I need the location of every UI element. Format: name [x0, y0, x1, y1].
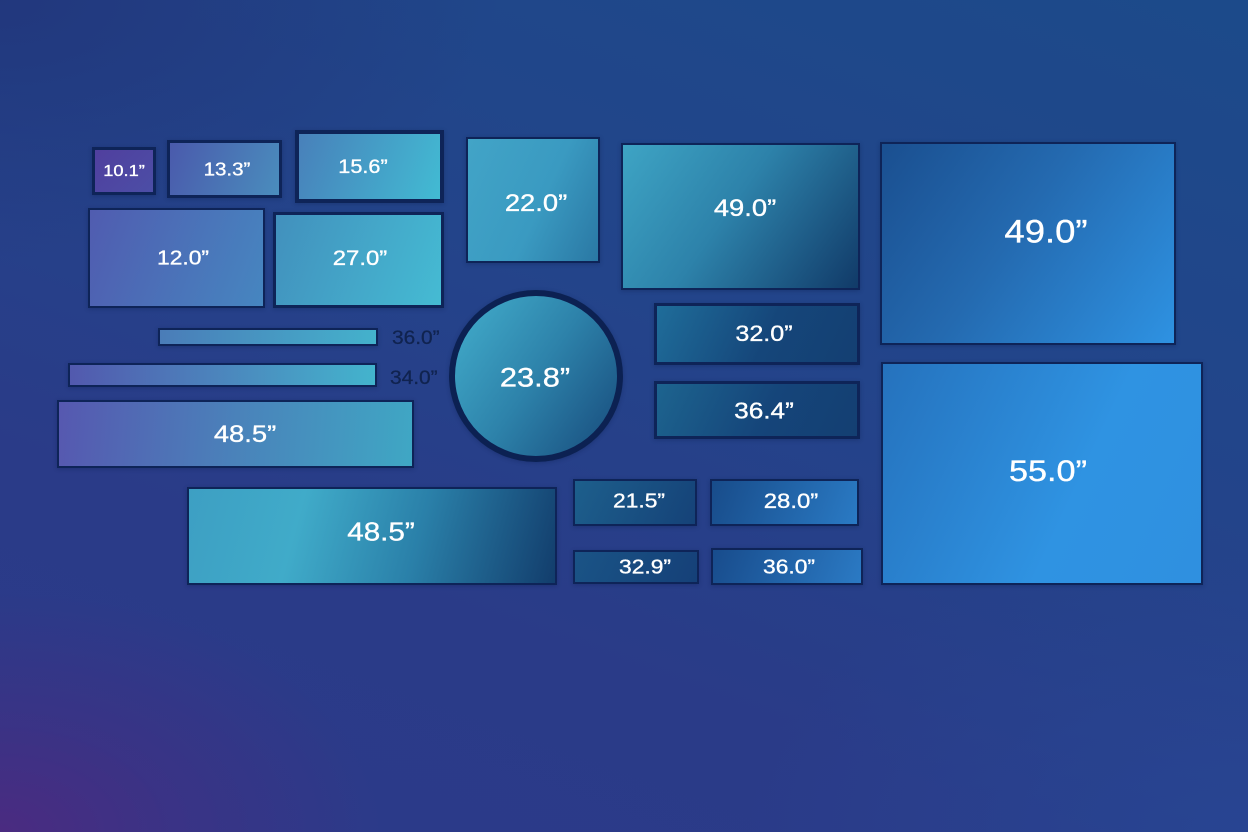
screen 36.0 inch: 36.0”: [763, 556, 815, 578]
screen 12.0 inch: 12.0”: [157, 248, 209, 270]
screen 32.9 inch: 32.9”: [619, 556, 671, 578]
screen 32.0 inch: 32.0”: [735, 321, 793, 346]
screen 49.0 inch medium: [621, 143, 860, 290]
screen 10.1 inch: [92, 147, 156, 195]
screen 15.6 inch: 15.6”: [338, 157, 388, 178]
screen 23.8 inch circle: [449, 290, 623, 462]
screen 55.0 inch: [881, 362, 1203, 585]
screen 22.0 inch: [466, 137, 600, 263]
screen 36.4 inch: 36.4”: [734, 398, 794, 424]
screen 15.6 inch: [295, 130, 444, 203]
bar screen 34.0 inch: [68, 363, 377, 387]
screen 36.0 inch: [711, 548, 863, 585]
screen 21.5 inch: [573, 479, 697, 526]
screen 28.0 inch: 28.0”: [764, 490, 818, 513]
screen 22.0 inch: 22.0”: [505, 190, 567, 217]
screen 48.5 inch lower: 48.5”: [347, 516, 415, 546]
screen 48.5 inch upper: [57, 400, 414, 468]
screen 49.0 inch large: 49.0”: [1004, 214, 1088, 250]
screen 27.0 inch: [273, 212, 444, 308]
screen 36.4 inch: [654, 381, 860, 439]
screen 48.5 inch lower: [187, 487, 557, 585]
screen 32.9 inch: [573, 550, 699, 584]
screen 13.3 inch: 13.3”: [204, 160, 250, 180]
bar screen 36.0 inch: [158, 328, 378, 346]
screen 49.0 inch medium: 49.0”: [714, 195, 776, 222]
screen 12.0 inch: [88, 208, 265, 308]
screen 32.0 inch: [654, 303, 860, 365]
screen 28.0 inch: [710, 479, 859, 526]
screen 21.5 inch: 21.5”: [613, 490, 665, 512]
screen 48.5 inch upper: 48.5”: [214, 421, 276, 448]
screen 49.0 inch large: [880, 142, 1176, 345]
screen 55.0 inch: 55.0”: [1009, 455, 1087, 488]
label 34.0 inch: 34.0”: [390, 368, 438, 389]
screen 13.3 inch: [167, 140, 282, 198]
screen 27.0 inch: 27.0”: [333, 247, 387, 270]
screen 23.8 inch circle: 23.8”: [500, 362, 570, 392]
label 36.0 inch: 36.0”: [392, 328, 440, 349]
screen 10.1 inch: 10.1”: [103, 163, 145, 180]
